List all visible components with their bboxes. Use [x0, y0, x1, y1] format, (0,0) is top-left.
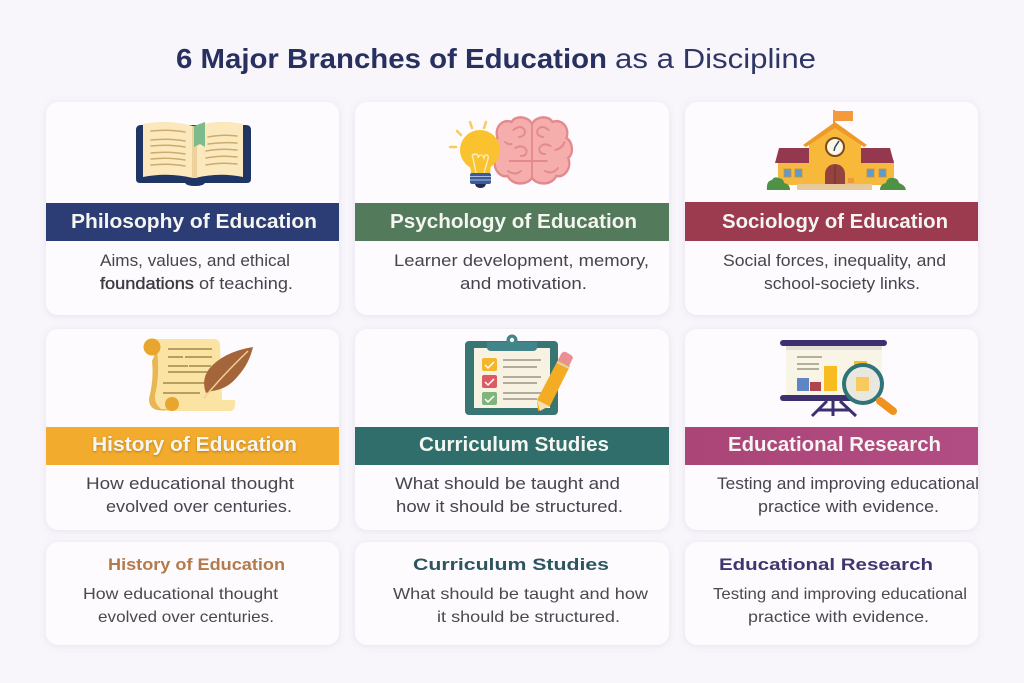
description: Social forces, inequality, and — [723, 252, 946, 270]
description: What should be taught and — [395, 475, 620, 493]
description: Aims, values, and ethical — [100, 252, 290, 270]
heading band — [46, 427, 339, 465]
panel: Curriculum Studies — [355, 329, 669, 530]
heading band: Educational Research — [728, 434, 941, 456]
panel: Sociology of Education — [685, 102, 978, 315]
description — [83, 586, 279, 626]
heading band: Curriculum Studies — [419, 434, 609, 456]
description: Testing and improving educational — [717, 475, 979, 493]
heading band — [46, 203, 339, 241]
description — [395, 475, 623, 516]
icon: clipboard and pencil — [465, 334, 573, 415]
panel: Educational Research summary — [685, 542, 978, 645]
description: it should be structured. — [437, 609, 620, 626]
description — [713, 586, 967, 626]
title: as a Discipline — [615, 43, 816, 74]
panel: Philosophy of Education — [46, 102, 339, 315]
heading band — [355, 203, 669, 241]
panel: Psychology of Education — [355, 102, 669, 315]
heading band: Sociology of Education — [722, 211, 948, 233]
heading: History of Education — [108, 555, 285, 574]
title — [176, 43, 816, 74]
description: school-society links. — [764, 275, 920, 293]
icon: presentation board and magnifier — [780, 340, 893, 416]
description — [393, 586, 649, 626]
panel: History of Education — [46, 329, 339, 530]
description: foundations of teaching. — [100, 275, 293, 293]
description — [717, 475, 979, 516]
icon: school building — [767, 110, 906, 190]
description: How educational thought — [83, 586, 279, 603]
icon: light bulb and brain — [450, 117, 572, 188]
icon: scroll and feather — [144, 338, 253, 411]
heading band — [685, 202, 978, 241]
description: evolved over centuries. — [98, 609, 274, 626]
heading band — [355, 427, 669, 465]
heading band — [685, 427, 978, 465]
description: practice with evidence. — [758, 498, 939, 516]
description: Testing and improving educational — [713, 586, 967, 603]
heading band: Psychology of Education — [390, 211, 637, 233]
description — [100, 252, 293, 293]
heading: Curriculum Studies — [413, 555, 609, 574]
description: What should be taught and how — [393, 586, 649, 603]
description: evolved over centuries. — [106, 498, 292, 516]
title: 6 Major Branches of Education — [176, 43, 607, 74]
description — [723, 252, 946, 293]
panel: Educational Research — [685, 329, 979, 530]
heading: Educational Research — [719, 555, 933, 574]
icon: open book — [136, 122, 251, 186]
panel: Curriculum Studies summary — [355, 542, 669, 645]
description: and motivation. — [460, 275, 587, 293]
description: How educational thought — [86, 475, 294, 493]
description — [394, 252, 649, 293]
heading band: History of Education — [92, 434, 297, 456]
description: practice with evidence. — [748, 609, 929, 626]
description — [86, 475, 294, 516]
description: how it should be structured. — [396, 498, 623, 516]
heading band: Philosophy of Education — [71, 211, 317, 233]
panel: History of Education summary — [46, 542, 339, 645]
description: Learner development, memory, — [394, 252, 649, 270]
